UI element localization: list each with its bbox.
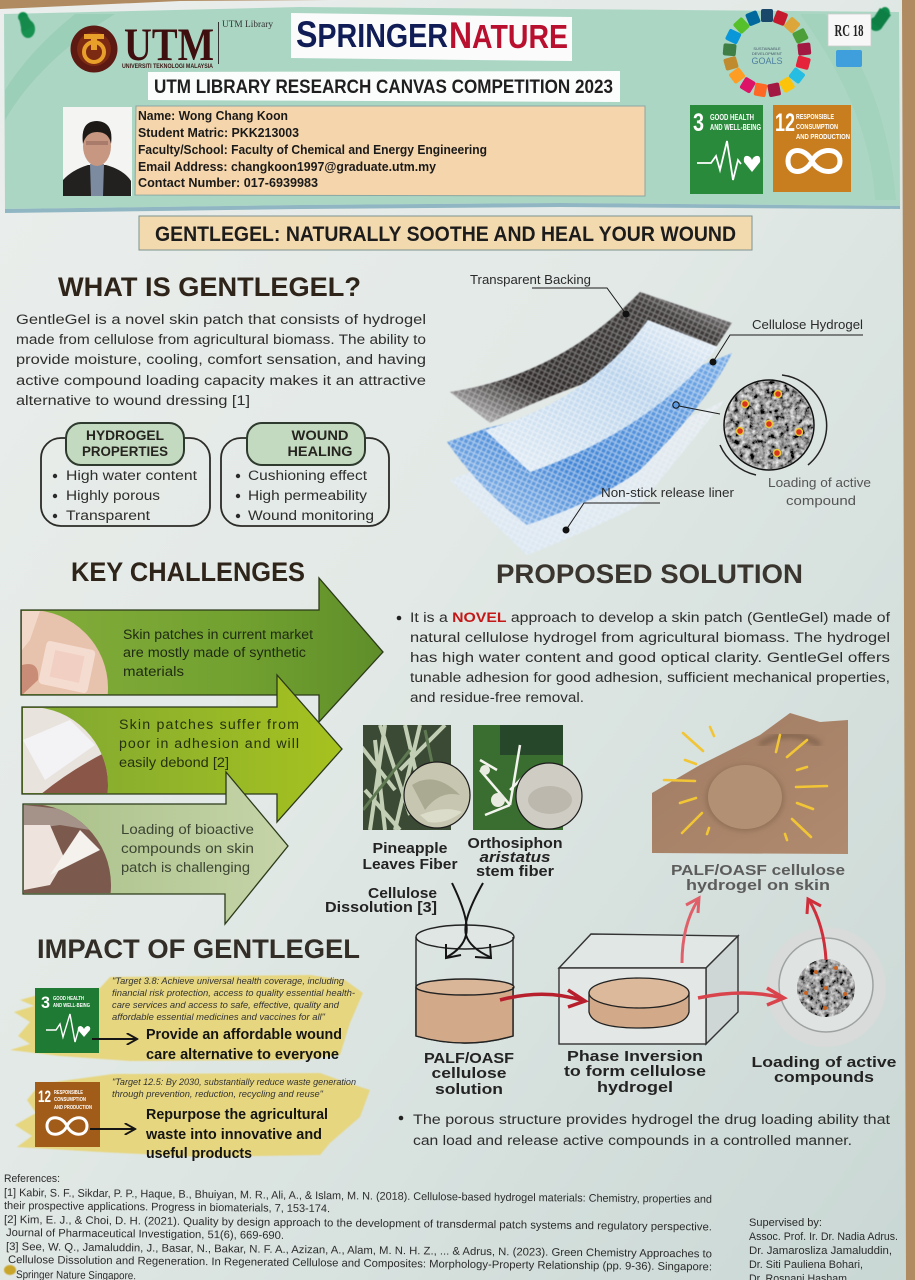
label: cellulose dissolution <box>325 886 437 916</box>
panel: wound healing <box>221 423 389 526</box>
profile photo <box>63 107 132 196</box>
Springer Nature logo <box>291 13 572 61</box>
logo divider <box>218 22 219 64</box>
SDG tile: 3 good health: GOOD HEALTH <box>710 113 754 122</box>
pill: wound healing heading <box>247 423 365 465</box>
intro paragraph <box>16 312 426 409</box>
label: pineapple leaves fiber <box>362 841 458 873</box>
SDG wheel: SUSTAINABLE <box>753 46 781 51</box>
Springer Nature logo: NATURE <box>449 15 568 56</box>
intro paragraph: provide moisture, cooling, comfort sensation, and having <box>16 352 426 368</box>
wound healing list: Wound monitoring <box>248 508 374 524</box>
icon: UTM crest <box>70 26 118 72</box>
references: [1] Kabir, S. F., Sikdar, P. P., Haque, B., Bhuiyan, M. R., Ali, A., & Islam, M. N. (2018). Cellulose-based hydrogel materials: Chemistry, properties and <box>4 1187 712 1206</box>
SDG 12 tile: AND PRODUCTION <box>54 1105 92 1111</box>
references: References: <box>4 1173 60 1185</box>
label: orthosiphon stem fiber: aristatus <box>480 850 550 866</box>
label: hydrogel on skin: hydrogel on skin <box>686 878 830 894</box>
wound healing list: Cushioning effect <box>248 468 367 484</box>
petri dish with loaded hydrogel <box>778 931 886 1046</box>
main title <box>139 216 752 250</box>
photo: hydrogel patch on skin <box>652 713 848 854</box>
SDG 3 tile: AND WELL-BEING <box>53 1003 90 1009</box>
porous structure note: The porous structure provides hydrogel the drug loading ability that <box>413 1112 890 1128</box>
proposed solution text: natural cellulose hydrogel from agricultural biomass. The hydrogel <box>410 630 890 646</box>
impact statement 1: care alternative to everyone <box>146 1046 339 1063</box>
matric: Student Matric: PKK213003 <box>138 126 299 140</box>
challenge 1 text: are mostly made of synthetic <box>123 645 306 661</box>
pill: wound healing heading: HEALING <box>288 444 352 459</box>
SDG 3 tile: 3 <box>41 993 50 1012</box>
impact statement 2: Repurpose the agricultural <box>146 1106 328 1123</box>
brush stroke background <box>15 1073 370 1157</box>
contact: Contact Number: 017-6939983 <box>138 176 318 190</box>
hydrogel properties list <box>53 468 197 524</box>
challenge 1 text: Skin patches in current market <box>123 627 313 643</box>
SDG 12 tile: 12 <box>38 1087 51 1106</box>
SDG tile: 3 good health: AND WELL-BEING <box>710 123 761 132</box>
photo: orthosiphon with fiber <box>473 725 582 830</box>
SDG tile: 12 responsible consumption: 12 <box>775 109 795 137</box>
callout: transparent backing <box>470 273 630 318</box>
student name: Name: Wong Chang Koon <box>138 109 288 123</box>
references: their prospective applications. Progress in biomaterials, 7, 153-174. <box>4 1200 330 1215</box>
label: loading of active compound <box>768 476 871 508</box>
arrow: phase inversion to loading <box>698 988 784 1005</box>
magnified pore view <box>673 375 827 475</box>
challenge 3 text <box>121 822 254 876</box>
heading: key challenges: KEY CHALLENGES <box>71 557 305 587</box>
logo subtitle: UNIVERSITI TEKNOLOGI MALAYSIA <box>122 63 213 70</box>
label: orthosiphon stem fiber: Orthosiphon <box>468 836 562 852</box>
intro paragraph: made from cellulose from agricultural biomass. The ability to <box>16 332 426 348</box>
heading: what is gentlegel: WHAT IS GENTLEGEL? <box>58 272 361 302</box>
UTM logo <box>70 19 274 72</box>
proposed solution text: has high water content and good optical clarity. GentleGel offers <box>410 650 890 666</box>
email: Email Address: changkoon1997@graduate.utm.my <box>138 160 436 174</box>
challenge 2 text <box>119 717 299 771</box>
photo: skin patch on arm <box>22 611 108 694</box>
label: pineapple leaves fiber: Leaves Fiber <box>362 857 458 873</box>
label: loading of active compound: compound <box>786 494 856 508</box>
label: cellulose dissolution: Dissolution [3] <box>325 900 437 916</box>
callout: release liner: Non-stick release liner <box>601 486 734 500</box>
callout: release liner <box>562 486 734 534</box>
intro paragraph: GentleGel is a novel skin patch that consists of hydrogel <box>16 312 426 328</box>
wound healing list: High permeability <box>248 488 368 504</box>
proposed solution text: and residue-free removal. <box>410 690 584 706</box>
label: phase inversion: Phase Inversion <box>567 1048 703 1065</box>
arrow <box>90 1128 134 1130</box>
label: cellulose solution: cellulose <box>432 1065 506 1082</box>
layer: transparent backing <box>450 292 732 423</box>
challenge 3 text: compounds on skin <box>121 841 254 857</box>
SDG tile: 12 responsible consumption: RESPONSIBLE <box>796 112 834 121</box>
competition title: UTM LIBRARY RESEARCH CANVAS COMPETITION 2023 <box>154 77 613 98</box>
label: orthosiphon stem fiber <box>468 836 562 880</box>
impact row 1 <box>10 975 363 1063</box>
SDG tile: 3 good health: 3 <box>693 109 704 137</box>
label: hydrogel on skin <box>671 863 845 894</box>
library label: UTM Library <box>222 19 274 29</box>
challenge arrow 2 <box>0 675 342 822</box>
impact statement 2: useful products <box>146 1145 252 1162</box>
challenge 2 text: Skin patches suffer from <box>119 717 299 733</box>
SDG wheel: GOALS <box>751 56 783 66</box>
impact row 2 <box>15 1073 370 1162</box>
supervisors: Dr. Jamarosliza Jamaluddin, <box>749 1245 892 1257</box>
target 12.5 quote: through prevention, reduction, recycling and reuse" <box>112 1089 324 1100</box>
layer: release liner <box>450 400 725 555</box>
target 3.8 quote: affordable essential medicines and vaccines for all" <box>112 1012 326 1023</box>
photo: pineapple leaves with fiber <box>360 725 470 830</box>
impact statement 1: Provide an affordable wound <box>146 1026 342 1043</box>
target 3.8 quote: financial risk protection, access to quality essential health- <box>112 988 355 999</box>
SDG 3 tile <box>35 988 99 1053</box>
heading: proposed solution: PROPOSED SOLUTION <box>496 559 803 589</box>
supervisors: Supervised by: <box>749 1217 822 1229</box>
label: loading of active compounds: Loading of active <box>752 1054 896 1071</box>
target 12.5 quote <box>112 1077 356 1100</box>
label: cellulose dissolution: Cellulose <box>368 886 437 902</box>
pill: wound healing heading: WOUND <box>292 428 349 443</box>
pill: hydrogel properties heading: PROPERTIES <box>82 444 168 459</box>
challenge 1 text <box>123 627 313 680</box>
layer: cellulose hydrogel <box>485 320 718 472</box>
callout: cellulose hydrogel <box>710 318 863 366</box>
hydrogel properties list: Highly porous <box>66 488 160 504</box>
callout: cellulose hydrogel: Cellulose Hydrogel <box>752 318 863 332</box>
references: [2] Kim, E. J., & Choi, D. H. (2021). Quality by design approach to the development of transdermal patch systems and regulatory perspective. <box>4 1214 712 1233</box>
challenge 2 text: easily debond [2] <box>119 755 229 771</box>
arrow: loading to skin <box>807 899 826 960</box>
brush stroke background <box>10 975 363 1061</box>
photo: gloved hand applying patch <box>24 805 111 893</box>
label: phase inversion: to form cellulose <box>564 1063 706 1080</box>
photo: patch debonding <box>23 708 108 793</box>
SDG tile: 12 responsible consumption: AND PRODUCTION <box>796 132 850 141</box>
Springer Nature logo: SPRINGER <box>296 14 448 55</box>
target 3.8 quote <box>112 976 355 1023</box>
logo wordmark: UTM <box>124 19 214 71</box>
impact statement 2 <box>145 1106 328 1162</box>
arrow: solution to phase inversion <box>500 990 585 1007</box>
heading: impact of gentlegel: IMPACT OF GENTLEGEL <box>37 934 360 964</box>
references: Cellulose Dissolution and Regeneration. In Regenerated Cellulose and Composites: Morphology-Property Relationship (pp. 9-36). Singapore: <box>8 1254 712 1273</box>
label: loading of active compound: Loading of active <box>768 476 871 490</box>
header band <box>4 7 900 213</box>
SDG wheel: DEVELOPMENT <box>752 51 783 56</box>
hydrogel properties list: Transparent <box>66 508 150 524</box>
proposed solution text: It is a NOVEL approach to develop a skin patch (GentleGel) made of <box>410 610 890 626</box>
panel: hydrogel properties <box>41 423 210 526</box>
SDG wheel <box>723 9 811 97</box>
supervisors: Dr. Siti Pauliena Bohari, <box>749 1259 863 1271</box>
yellow glow rays <box>664 727 827 840</box>
RC 18 label <box>828 14 871 46</box>
porous structure note: can load and release active compounds in a controlled manner. <box>413 1133 852 1149</box>
impact statement 1 <box>146 1026 342 1063</box>
arrow <box>92 1038 136 1040</box>
callout: transparent backing: Transparent Backing <box>470 273 591 287</box>
pin: top right <box>869 7 891 31</box>
target 3.8 quote: care services and access to safe, effective, quality and <box>112 1000 340 1011</box>
layer: blue hydrogel <box>447 353 732 525</box>
main title: GENTLEGEL: NATURALLY SOOTHE AND HEAL YOUR WOUND <box>155 223 736 246</box>
skin patch layer diagram <box>447 273 871 555</box>
label: loading of active compounds <box>752 1054 896 1086</box>
phase inversion box <box>559 934 738 1044</box>
challenge arrow 3 <box>0 772 288 924</box>
challenge 3 text: patch is challenging <box>121 860 250 876</box>
pin: bottom left <box>4 1265 16 1275</box>
intro paragraph: alternative to wound dressing [1] <box>16 393 250 409</box>
arrows: fibers into beaker <box>446 883 491 958</box>
RC 18 label: RC 18 <box>834 21 864 40</box>
challenge 1 text: materials <box>123 664 184 680</box>
proposed solution text: tunable adhesion for good adhesion, sufficient mechanical properties, <box>410 670 890 686</box>
blue sticker <box>836 50 862 67</box>
SDG tile: 12 responsible consumption <box>773 105 851 192</box>
label: hydrogel on skin: PALF/OASF cellulose <box>671 863 845 879</box>
pill: hydrogel properties heading <box>66 423 184 465</box>
wound healing list <box>236 468 374 524</box>
intro paragraph: active compound loading capacity makes it an attractive <box>16 373 426 389</box>
hydrogel disk <box>589 978 689 1028</box>
label: pineapple leaves fiber: Pineapple <box>372 841 448 857</box>
references: [3] See, W. Q., Jamaluddin, J., Basar, N., Bakar, N. F. A., Azizan, A., Alam, M. N. H. Z., ... & Adrus, N. (2023). Green Chemistry Approaches to <box>6 1241 712 1260</box>
target 12.5 quote: "Target 12.5: By 2030, substantially reduce waste generation <box>112 1077 356 1088</box>
SDG tile: 3 good health <box>690 105 763 194</box>
supervisors <box>749 1217 898 1280</box>
challenge 3 text: Loading of bioactive <box>121 822 254 838</box>
references: Journal of Pharmaceutical Investigation, 51(6), 669-690. <box>6 1227 284 1242</box>
pill: hydrogel properties heading: HYDROGEL <box>86 428 164 443</box>
faculty: Faculty/School: Faculty of Chemical and Energy Engineering <box>138 143 487 157</box>
pin: top left <box>18 12 35 38</box>
supervisors: Assoc. Prof. Ir. Dr. Nadia Adrus. <box>749 1231 898 1243</box>
hydrogel properties list: High water content <box>66 468 197 484</box>
label: loading of active compounds: compounds <box>774 1069 874 1086</box>
label: orthosiphon stem fiber: stem fiber <box>476 864 554 880</box>
target 3.8 quote: "Target 3.8: Achieve universal health coverage, including <box>112 976 345 987</box>
SDG 12 tile <box>35 1082 100 1147</box>
arrow: hydrogel to skin <box>682 898 699 963</box>
label: cellulose solution <box>424 1050 514 1098</box>
challenge arrow 1 <box>0 578 383 722</box>
SDG 12 tile: RESPONSIBLE <box>54 1090 84 1096</box>
porous structure note <box>399 1112 890 1149</box>
competition title <box>148 71 620 102</box>
challenge 2 text: poor in adhesion and will <box>119 736 299 752</box>
label: phase inversion <box>564 1048 706 1096</box>
SDG 12 tile: CONSUMPTION <box>54 1097 86 1103</box>
SDG tile: 12 responsible consumption: CONSUMPTION <box>796 122 838 131</box>
label: phase inversion: hydrogel <box>597 1079 673 1096</box>
label: cellulose solution: solution <box>435 1081 503 1098</box>
beaker with cellulose solution <box>416 925 514 1043</box>
references <box>4 1173 712 1280</box>
impact statement 2: waste into innovative and <box>145 1126 322 1143</box>
proposed solution text <box>397 610 890 706</box>
SDG 3 tile: GOOD HEALTH <box>53 996 84 1002</box>
label: cellulose solution: PALF/OASF <box>424 1050 514 1067</box>
student info box <box>135 106 645 196</box>
